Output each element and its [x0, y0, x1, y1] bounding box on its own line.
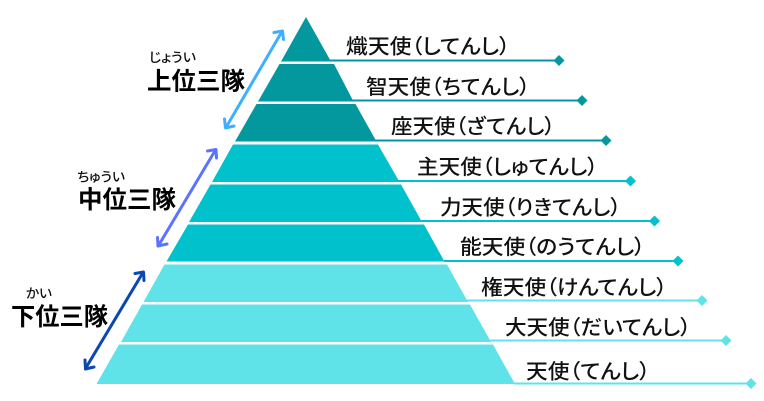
label: seraphim: 熾天使（してんし） [346, 30, 510, 60]
label: thrones: 座天使（ざてんし） [391, 110, 555, 140]
tier: upper group bands [235, 17, 376, 142]
group label: middle [77, 166, 176, 216]
heading: upper: 上位三隊 [147, 62, 245, 98]
heading: lower: 下位三隊 [11, 298, 108, 333]
leader: cherubim [352, 95, 588, 106]
group label: upper [147, 47, 245, 98]
ruby: middle: ちゅうい [77, 166, 126, 186]
label: archangels: 大天使（だいてんし） [505, 310, 691, 340]
tier: middle group bands [166, 144, 444, 262]
leader: angels [514, 378, 756, 389]
arrow: middle group [158, 150, 216, 246]
ruby: lower: かい [26, 283, 53, 302]
leader: virtues [421, 216, 660, 226]
pyramid [96, 17, 515, 384]
tier: lower group bands [96, 264, 515, 384]
leader: thrones [375, 135, 612, 146]
leader: principalities [467, 295, 708, 306]
label: angels: 天使（てんし） [526, 354, 650, 384]
label: principalities: 権天使（けんてんし） [481, 270, 667, 300]
group label: lower [11, 283, 108, 333]
label: powers: 能天使（のうてんし） [460, 230, 645, 260]
angel name labels [346, 30, 691, 384]
leader: dominions [398, 176, 636, 186]
leader: powers [444, 256, 684, 266]
arrow: upper group [224, 31, 284, 128]
label: virtues: 力天使（りきてんし） [440, 190, 621, 220]
leader: archangels [490, 335, 732, 346]
label: cherubim: 智天使（ちてんし） [366, 70, 530, 100]
leader lines [330, 55, 756, 389]
heading: middle: 中位三隊 [78, 181, 176, 216]
arrow: lower group [85, 272, 144, 369]
label: dominions: 主天使（しゅてんし） [417, 150, 598, 180]
leader: seraphim [330, 55, 564, 66]
ruby: upper: じょうい [149, 47, 197, 66]
